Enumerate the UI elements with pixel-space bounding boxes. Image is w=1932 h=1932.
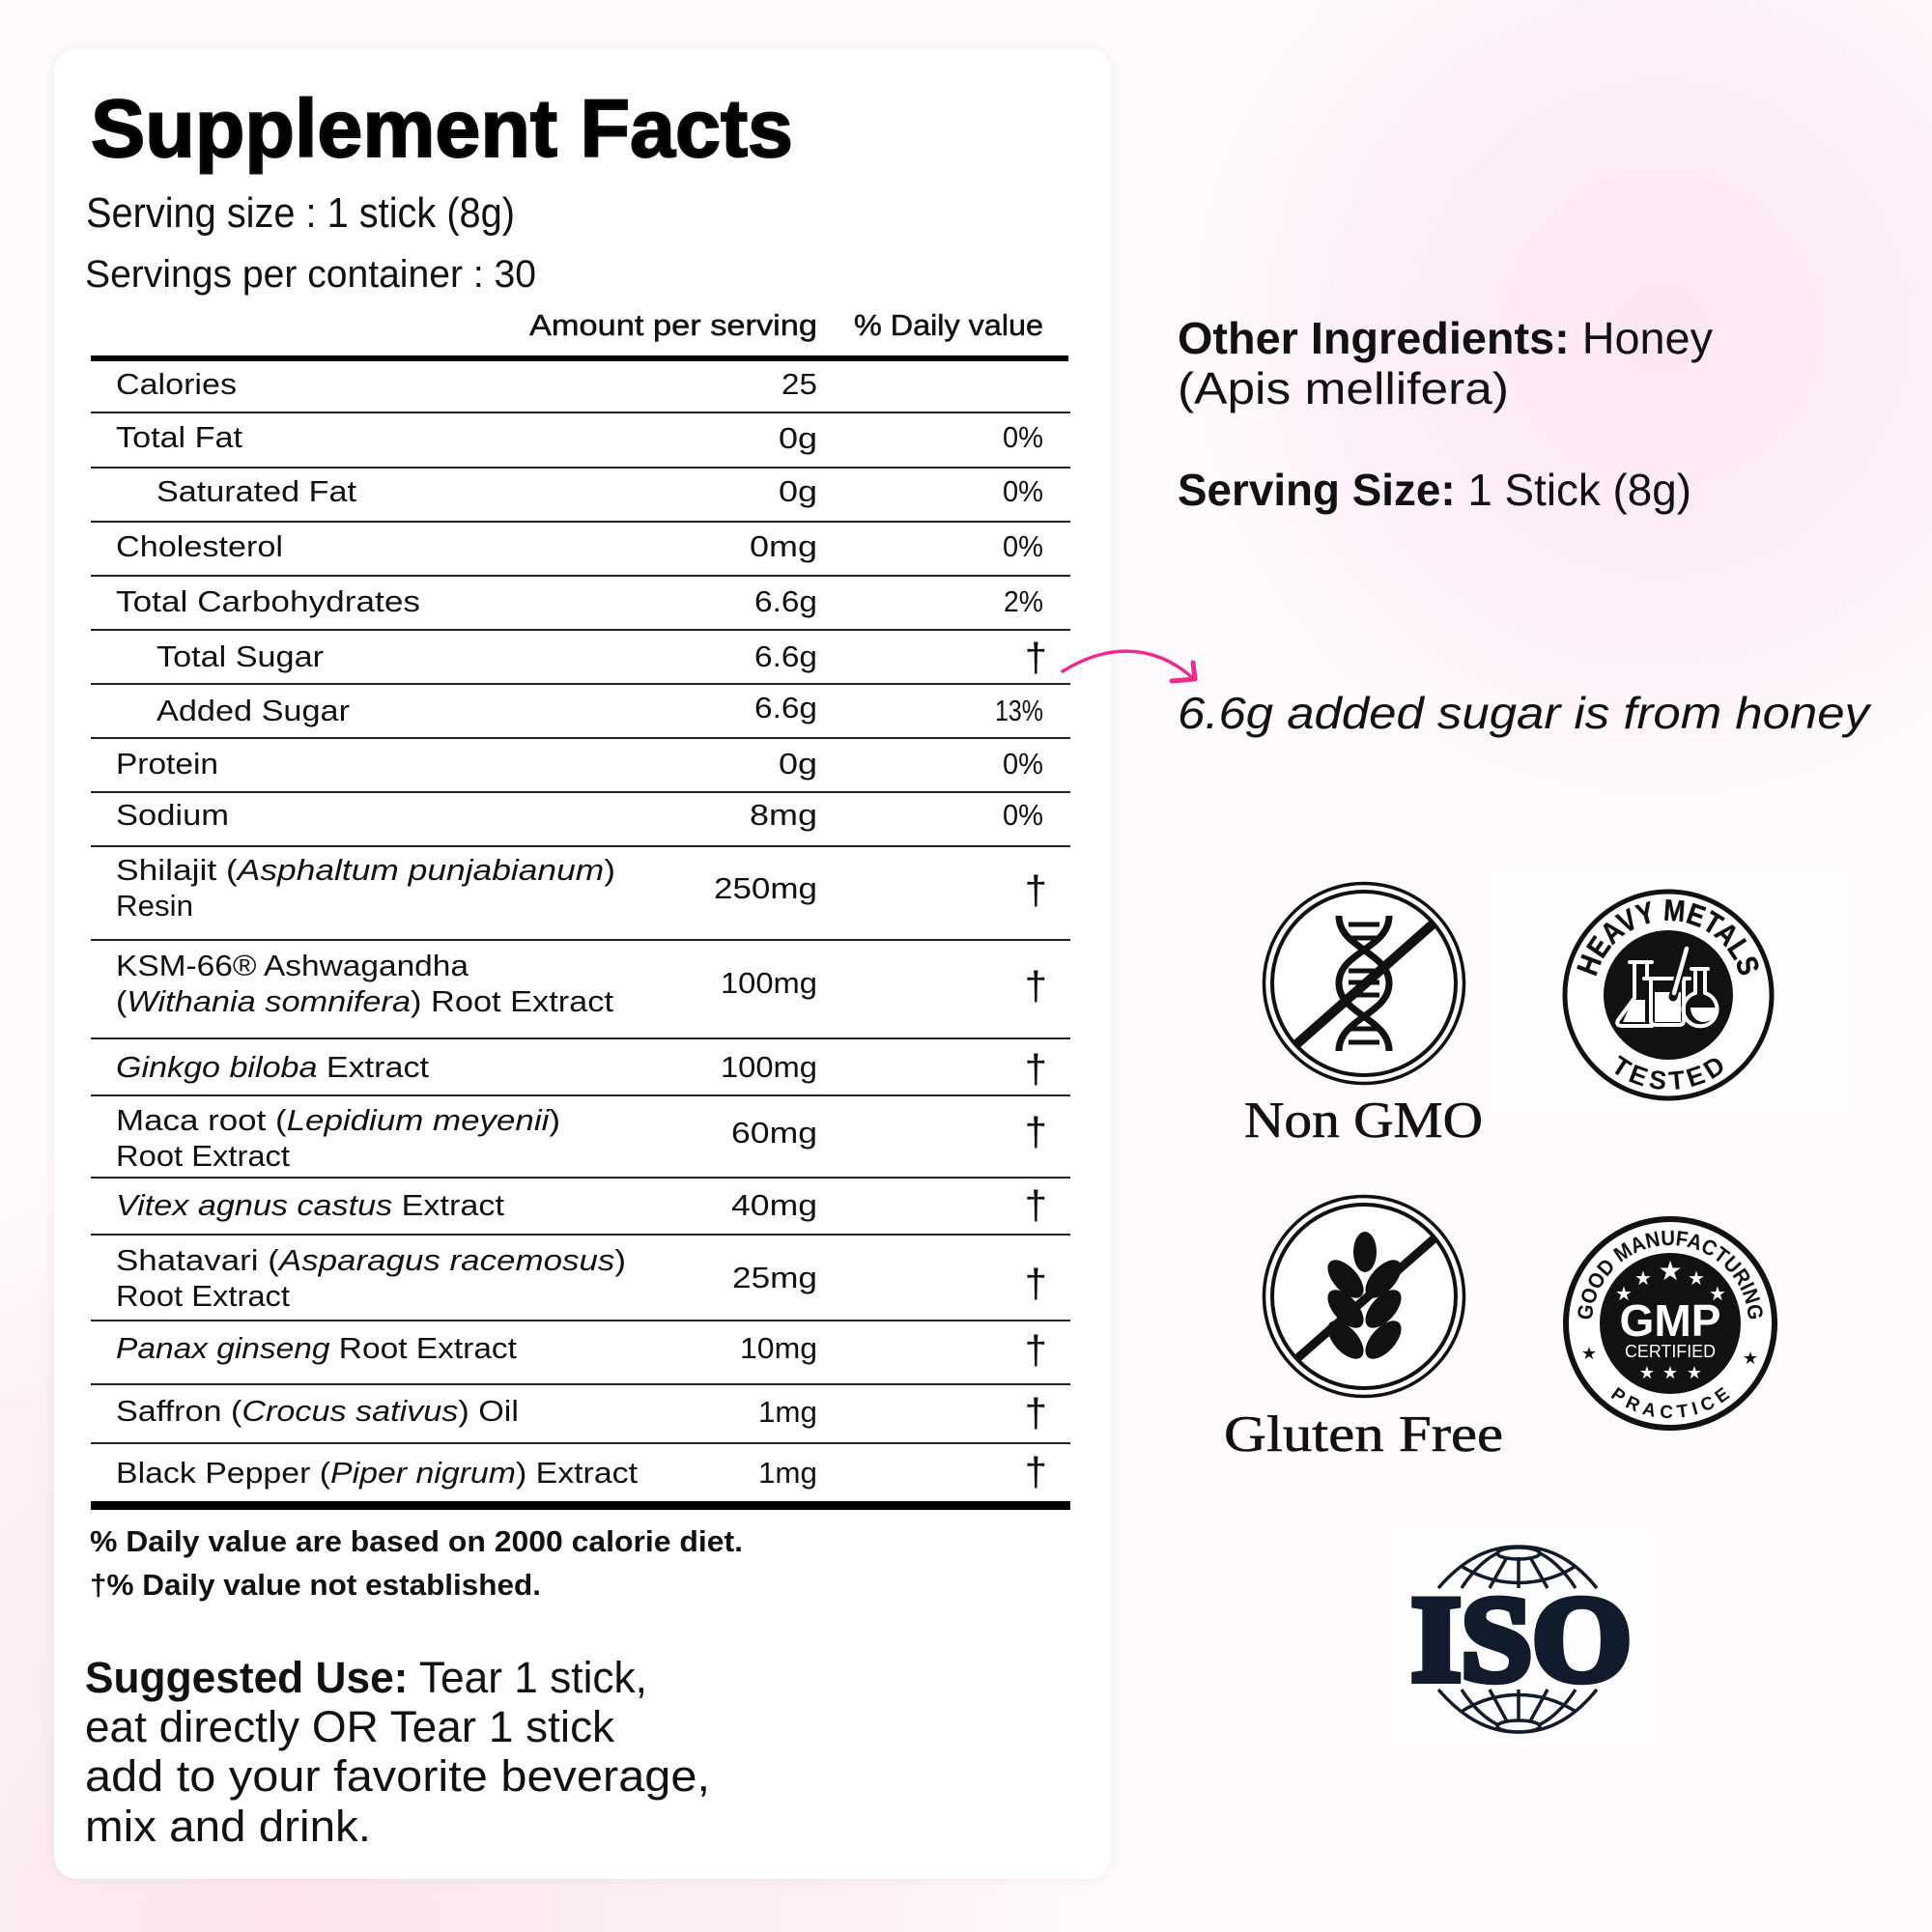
suggested use: add to your favorite beverage, — [85, 1751, 710, 1801]
row: panax — [91, 1327, 1070, 1385]
footnotes: % Daily value are based on 2000 calorie diet. — [90, 1524, 743, 1558]
table header — [91, 308, 1068, 361]
row: added sugar: 6.6g — [754, 691, 817, 724]
stars: ★ — [1581, 1344, 1597, 1364]
row: sodium: Sodium — [116, 798, 229, 832]
stars: ★ — [1688, 1266, 1705, 1290]
row: added sugar — [91, 691, 1070, 739]
row: total fat: 0g — [779, 421, 817, 455]
suggested use — [85, 1653, 710, 1851]
badge: gmp certified: PRACTICE — [1611, 1387, 1730, 1418]
other ingredients: Other Ingredients: Honey — [1178, 313, 1713, 363]
row: shilajit: Shilajit ( Asphaltum punjabianum ) — [116, 853, 615, 887]
suggested use: mix and drink. — [85, 1802, 371, 1851]
row: vitex — [91, 1182, 1070, 1236]
servings per container: Servings per container : 30 — [85, 253, 536, 296]
row: protein — [91, 747, 1070, 793]
row: panax: † — [1025, 1327, 1047, 1373]
arrow — [1063, 651, 1195, 681]
row: black pepper — [91, 1449, 1070, 1510]
stars: ★ — [1658, 1255, 1683, 1287]
row: saffron: † — [1025, 1390, 1047, 1435]
serving size note: Serving Size: 1 Stick (8g) — [1178, 465, 1691, 515]
row: ashwagandha: KSM-66® Ashwagandha — [116, 949, 469, 982]
row: shatavari: 25mg — [732, 1261, 817, 1294]
row: maca: Maca root ( Lepidium meyenii ) — [116, 1103, 560, 1137]
row: black pepper: † — [1025, 1449, 1047, 1494]
row: shatavari: Shatavari ( Asparagus racemosus ) — [116, 1243, 626, 1277]
row: vitex: 40mg — [731, 1188, 817, 1222]
row: vitex: Vitex agnus castus Extract — [116, 1188, 504, 1222]
added sugar note: 6.6g added sugar is from honey — [1178, 688, 1872, 738]
row: total carbohydrates: 6.6g — [754, 584, 817, 618]
row: protein: 0g — [779, 747, 817, 781]
row: total carbohydrates: Total Carbohydrates — [116, 584, 420, 618]
row: ashwagandha: 100mg — [721, 966, 817, 1000]
table header: % Daily value — [854, 308, 1043, 342]
row: maca: Root Extract — [116, 1139, 290, 1173]
row: added sugar: 13% — [995, 694, 1043, 727]
badge: gluten free: Gluten Free — [1224, 1406, 1503, 1463]
suggested use: eat directly OR Tear 1 stick — [85, 1702, 615, 1751]
row: protein: 0% — [1003, 747, 1043, 781]
row: maca — [91, 1103, 1070, 1179]
badge: non gmo: Non GMO — [1244, 1093, 1483, 1149]
row: ginkgo: Ginkgo biloba Extract — [116, 1050, 429, 1084]
stars: ★ — [1639, 1363, 1655, 1383]
badge: heavy metals tested: TESTED — [1615, 1055, 1723, 1090]
row: cholesterol: Cholesterol — [116, 529, 283, 563]
icon: lab flasks — [1617, 948, 1717, 1026]
other ingredients — [1178, 313, 1713, 413]
row: saffron: 1mg — [758, 1395, 817, 1429]
row: total sugar: 6.6g — [754, 639, 817, 673]
row: sodium — [91, 798, 1070, 847]
row: cholesterol: 0% — [1003, 529, 1043, 563]
stars: ★ — [1662, 1363, 1678, 1383]
row: ginkgo — [91, 1046, 1070, 1096]
row: cholesterol: 0mg — [750, 529, 817, 563]
row: total sugar: † — [1025, 635, 1047, 680]
row: total carbohydrates — [91, 584, 1070, 631]
row: cholesterol — [91, 529, 1070, 577]
row: shilajit: 250mg — [714, 871, 817, 905]
row: protein: Protein — [116, 747, 218, 781]
row: black pepper: Black Pepper ( Piper nigrum ) Extract — [116, 1456, 638, 1490]
serving size: Serving size : 1 stick (8g) — [86, 189, 515, 237]
row: shilajit: Resin — [116, 889, 193, 923]
row: panax: Panax ginseng Root Extract — [116, 1331, 517, 1365]
row: saffron: Saffron ( Crocus sativus ) Oil — [116, 1394, 519, 1428]
badge: gmp certified: GMP — [1619, 1295, 1721, 1346]
stars: ★ — [1687, 1363, 1702, 1383]
row: saturated fat: 0g — [779, 474, 817, 508]
badge: gmp certified: CERTIFIED — [1625, 1342, 1716, 1361]
table header: Amount per serving — [529, 308, 817, 342]
badge: non gmo — [1244, 883, 1483, 1149]
other ingredients: (Apis mellifera) — [1178, 363, 1509, 413]
icon: dna — [1295, 916, 1435, 1051]
row: ashwagandha: † — [1025, 963, 1047, 1009]
row: shatavari: Root Extract — [116, 1279, 290, 1313]
badge: iso: ISO — [1411, 1573, 1632, 1707]
row: ginkgo: 100mg — [721, 1050, 817, 1084]
title: Supplement Facts — [91, 83, 793, 174]
row: shatavari — [91, 1243, 1070, 1321]
badge: iso — [1391, 1531, 1647, 1748]
row: maca: 60mg — [731, 1116, 817, 1150]
badge: heavy metals tested: HEAVY METALS — [1577, 899, 1758, 976]
stars — [1581, 1255, 1758, 1383]
row: total sugar — [91, 635, 1070, 685]
row: shatavari: † — [1025, 1261, 1047, 1306]
row: calories — [91, 367, 1070, 413]
row: saturated fat — [91, 474, 1070, 523]
icon: wheat — [1321, 1232, 1407, 1365]
row: ginkgo: † — [1025, 1046, 1047, 1092]
stars: ★ — [1709, 1282, 1726, 1305]
row: maca: † — [1025, 1109, 1047, 1154]
footnotes: †% Daily value not established. — [90, 1568, 541, 1602]
row: calories: 25 — [781, 367, 817, 401]
icon: globe — [1438, 1547, 1597, 1732]
row: total carbohydrates: 2% — [1004, 584, 1043, 618]
badge: gmp certified — [1563, 1216, 1777, 1431]
row: saturated fat: 0% — [1003, 474, 1043, 508]
panel: supplement facts card — [54, 48, 1111, 1879]
row: vitex: † — [1025, 1182, 1047, 1228]
badge: gluten free — [1224, 1196, 1503, 1463]
row: added sugar: Added Sugar — [156, 694, 350, 727]
stars: ★ — [1615, 1282, 1633, 1305]
row: total fat: Total Fat — [116, 420, 242, 454]
row: shilajit — [91, 853, 1070, 941]
stars: ★ — [1743, 1349, 1758, 1369]
row: shilajit: † — [1025, 867, 1047, 913]
row: panax: 10mg — [740, 1331, 817, 1365]
row: saturated fat: Saturated Fat — [156, 474, 356, 508]
row: ashwagandha: (Withania somnifera ) Root Extract — [116, 984, 613, 1018]
footnotes — [90, 1524, 743, 1602]
row: total fat — [91, 420, 1070, 469]
badge: gmp certified: GOOD MANUFACTURING — [1577, 1231, 1763, 1320]
row: sodium: 0% — [1003, 798, 1043, 832]
badge: heavy metals tested — [1563, 889, 1774, 1101]
suggested use: Suggested Use: Tear 1 stick, — [85, 1653, 647, 1702]
facts table — [91, 308, 1070, 1510]
row: sodium: 8mg — [750, 798, 817, 832]
row: total sugar: Total Sugar — [156, 639, 324, 673]
row: saffron — [91, 1390, 1070, 1444]
row: ashwagandha — [91, 949, 1070, 1039]
stars: ★ — [1634, 1266, 1652, 1290]
row: calories: Calories — [116, 367, 237, 401]
row: total fat: 0% — [1003, 420, 1043, 454]
row: black pepper: 1mg — [758, 1456, 817, 1490]
